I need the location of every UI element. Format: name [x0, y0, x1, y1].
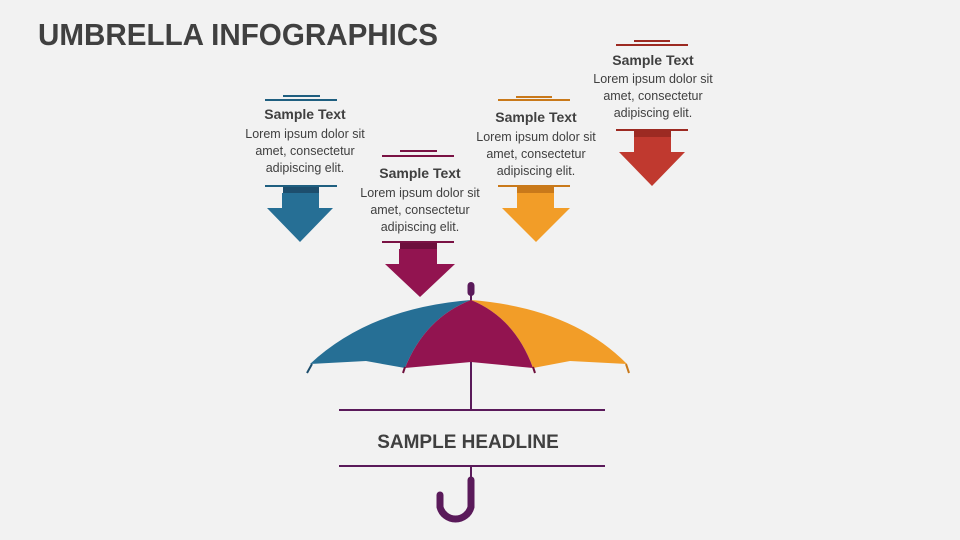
text block: red: Lorem ipsum dolor sit [593, 72, 713, 86]
arrow: orange [498, 186, 570, 242]
heading: orange: Sample Text [495, 109, 577, 125]
title: UMBRELLA INFOGRAPHICS [38, 17, 438, 52]
text block: magenta: amet, consectetur [370, 203, 470, 217]
heading: red: Sample Text [612, 52, 694, 68]
arrow: blue [265, 186, 337, 242]
text block: blue: amet, consectetur [255, 144, 355, 158]
text block: magenta: adipiscing elit. [381, 220, 459, 234]
text block: blue: adipiscing elit. [266, 161, 344, 175]
heading: blue: Sample Text [264, 106, 346, 122]
text block: blue: Lorem ipsum dolor sit [245, 127, 365, 141]
arrow: red [616, 130, 688, 186]
panel: magenta item [360, 151, 480, 297]
text block: orange: adipiscing elit. [497, 164, 575, 178]
text block: orange: Lorem ipsum dolor sit [476, 130, 596, 144]
arrow: magenta [382, 242, 455, 297]
text block: red: adipiscing elit. [614, 106, 692, 120]
text block: magenta: Lorem ipsum dolor sit [360, 186, 480, 200]
panel: orange item [476, 97, 596, 242]
heading: magenta: Sample Text [379, 165, 461, 181]
umbrella [307, 282, 629, 410]
text block: red: amet, consectetur [603, 89, 703, 103]
text block: orange: amet, consectetur [486, 147, 586, 161]
panel: blue item [245, 96, 365, 242]
umbrella handle [440, 466, 471, 519]
headline: SAMPLE HEADLINE [377, 432, 559, 453]
panel: red item [593, 41, 713, 186]
